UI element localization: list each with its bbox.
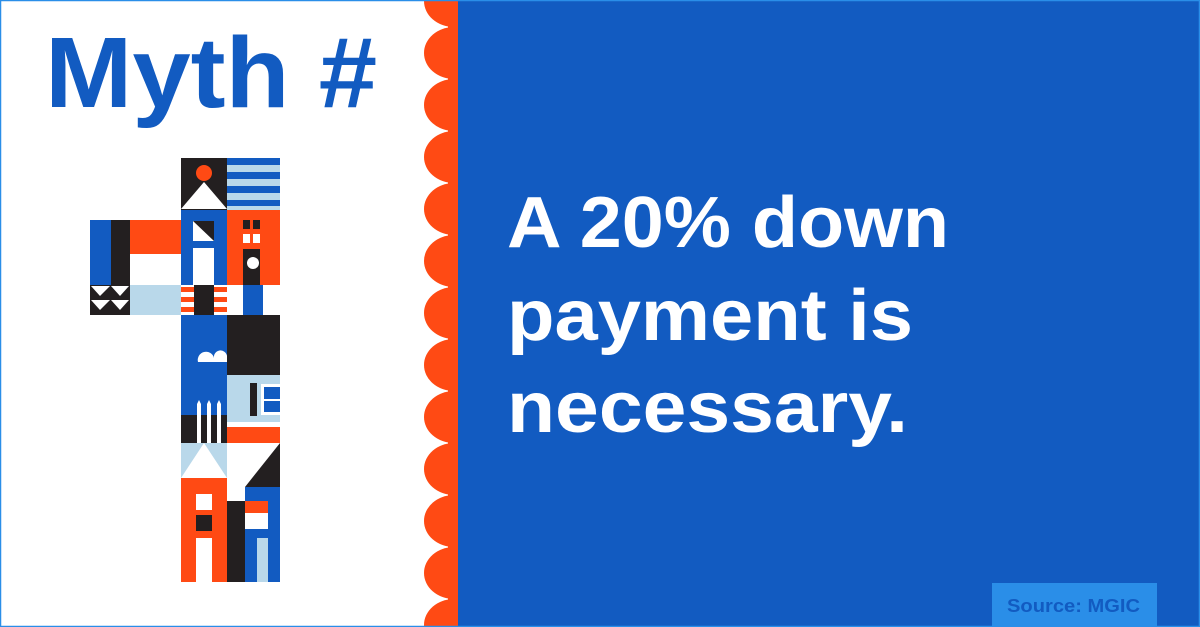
- title: Myth #: [45, 17, 377, 129]
- main statement text: A 20% down: [507, 183, 949, 263]
- main statement text: [507, 183, 949, 448]
- scalloped orange border: [424, 0, 484, 627]
- source badge: [992, 583, 1157, 627]
- source badge: Source: MGIC: [1007, 596, 1140, 616]
- main statement text: payment is: [507, 276, 913, 356]
- panel: blue right: [458, 0, 1200, 627]
- illustration: number 1 made of houses: [90, 158, 280, 582]
- main statement text: necessary.: [507, 368, 908, 448]
